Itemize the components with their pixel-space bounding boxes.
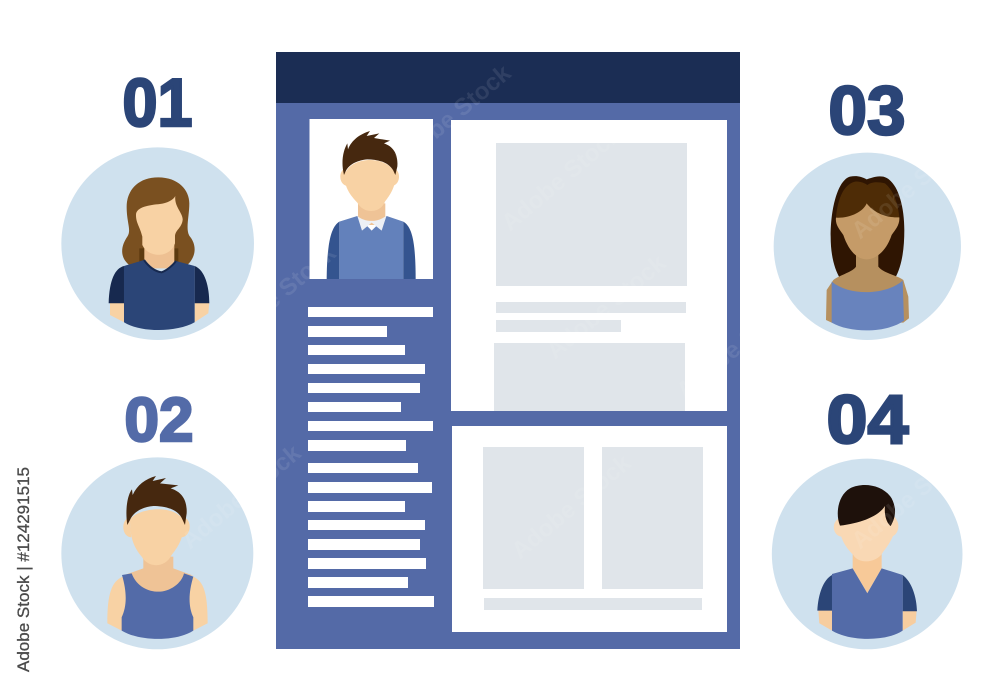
panel: resume document	[276, 52, 740, 649]
under hair shadow	[139, 248, 178, 264]
avatar 02: man in tank top	[61, 457, 253, 649]
tank top	[122, 573, 193, 639]
portrait hair	[342, 131, 397, 175]
chest fill	[130, 575, 185, 593]
left column text lines	[308, 307, 434, 607]
ears	[834, 518, 898, 537]
hair	[122, 177, 195, 266]
arms	[818, 610, 917, 631]
watermark overlay: Adobe Stock	[177, 439, 307, 555]
watermark overlay	[177, 59, 977, 565]
sleeves	[817, 575, 917, 611]
portrait vest	[339, 216, 403, 280]
sleeves	[109, 266, 209, 303]
number 03: 03	[828, 72, 906, 149]
portrait ears	[340, 168, 399, 186]
face	[839, 503, 897, 561]
circle background	[774, 153, 961, 340]
hair	[126, 476, 187, 525]
circle background	[61, 147, 254, 340]
portrait neck	[358, 203, 385, 225]
lower content card	[452, 426, 727, 632]
watermark overlay: Adobe Stock	[847, 129, 977, 245]
number 02: 02	[124, 386, 194, 455]
number 01: 01	[122, 65, 192, 141]
neck	[144, 240, 174, 268]
portrait left sleeve	[327, 222, 339, 280]
photo frame with portrait	[310, 119, 433, 280]
shoulders	[107, 577, 208, 631]
neck and chest	[123, 557, 193, 576]
shirt	[832, 568, 903, 639]
face	[136, 196, 183, 255]
hair	[838, 485, 895, 526]
watermark overlay: Adobe Stock	[387, 59, 517, 175]
circle background	[772, 459, 962, 649]
side credit text: Adobe Stock | #124291515	[14, 467, 33, 672]
watermark overlay: Adobe Stock	[672, 289, 802, 405]
avatar 01: woman with brown hair	[61, 147, 254, 340]
document body	[276, 52, 740, 649]
watermark overlay: Adobe Stock	[212, 239, 342, 355]
circle background	[61, 457, 253, 649]
neck and shoulders	[826, 247, 909, 323]
arms	[110, 303, 209, 322]
upper content card	[451, 120, 727, 411]
face	[836, 203, 899, 259]
watermark overlay: Adobe Stock	[542, 249, 672, 365]
portrait collar	[357, 215, 387, 231]
neck	[853, 553, 882, 593]
face	[130, 509, 184, 565]
watermark overlay: Adobe Stock	[507, 449, 637, 565]
document header bar	[276, 52, 740, 103]
ears	[123, 517, 190, 537]
top	[832, 281, 904, 330]
portrait right sleeve	[403, 222, 416, 280]
avatar 04: man with black hair	[772, 459, 962, 649]
shirt	[124, 260, 195, 330]
watermark overlay: Adobe Stock	[497, 121, 627, 237]
number 04: 04	[826, 381, 908, 458]
watermark overlay: Adobe Stock	[847, 439, 977, 555]
fringe	[836, 182, 899, 220]
avatar 03: woman with long dark hair	[774, 153, 961, 340]
back hair	[831, 176, 904, 278]
shirt collar	[144, 260, 176, 272]
portrait face	[345, 160, 395, 211]
